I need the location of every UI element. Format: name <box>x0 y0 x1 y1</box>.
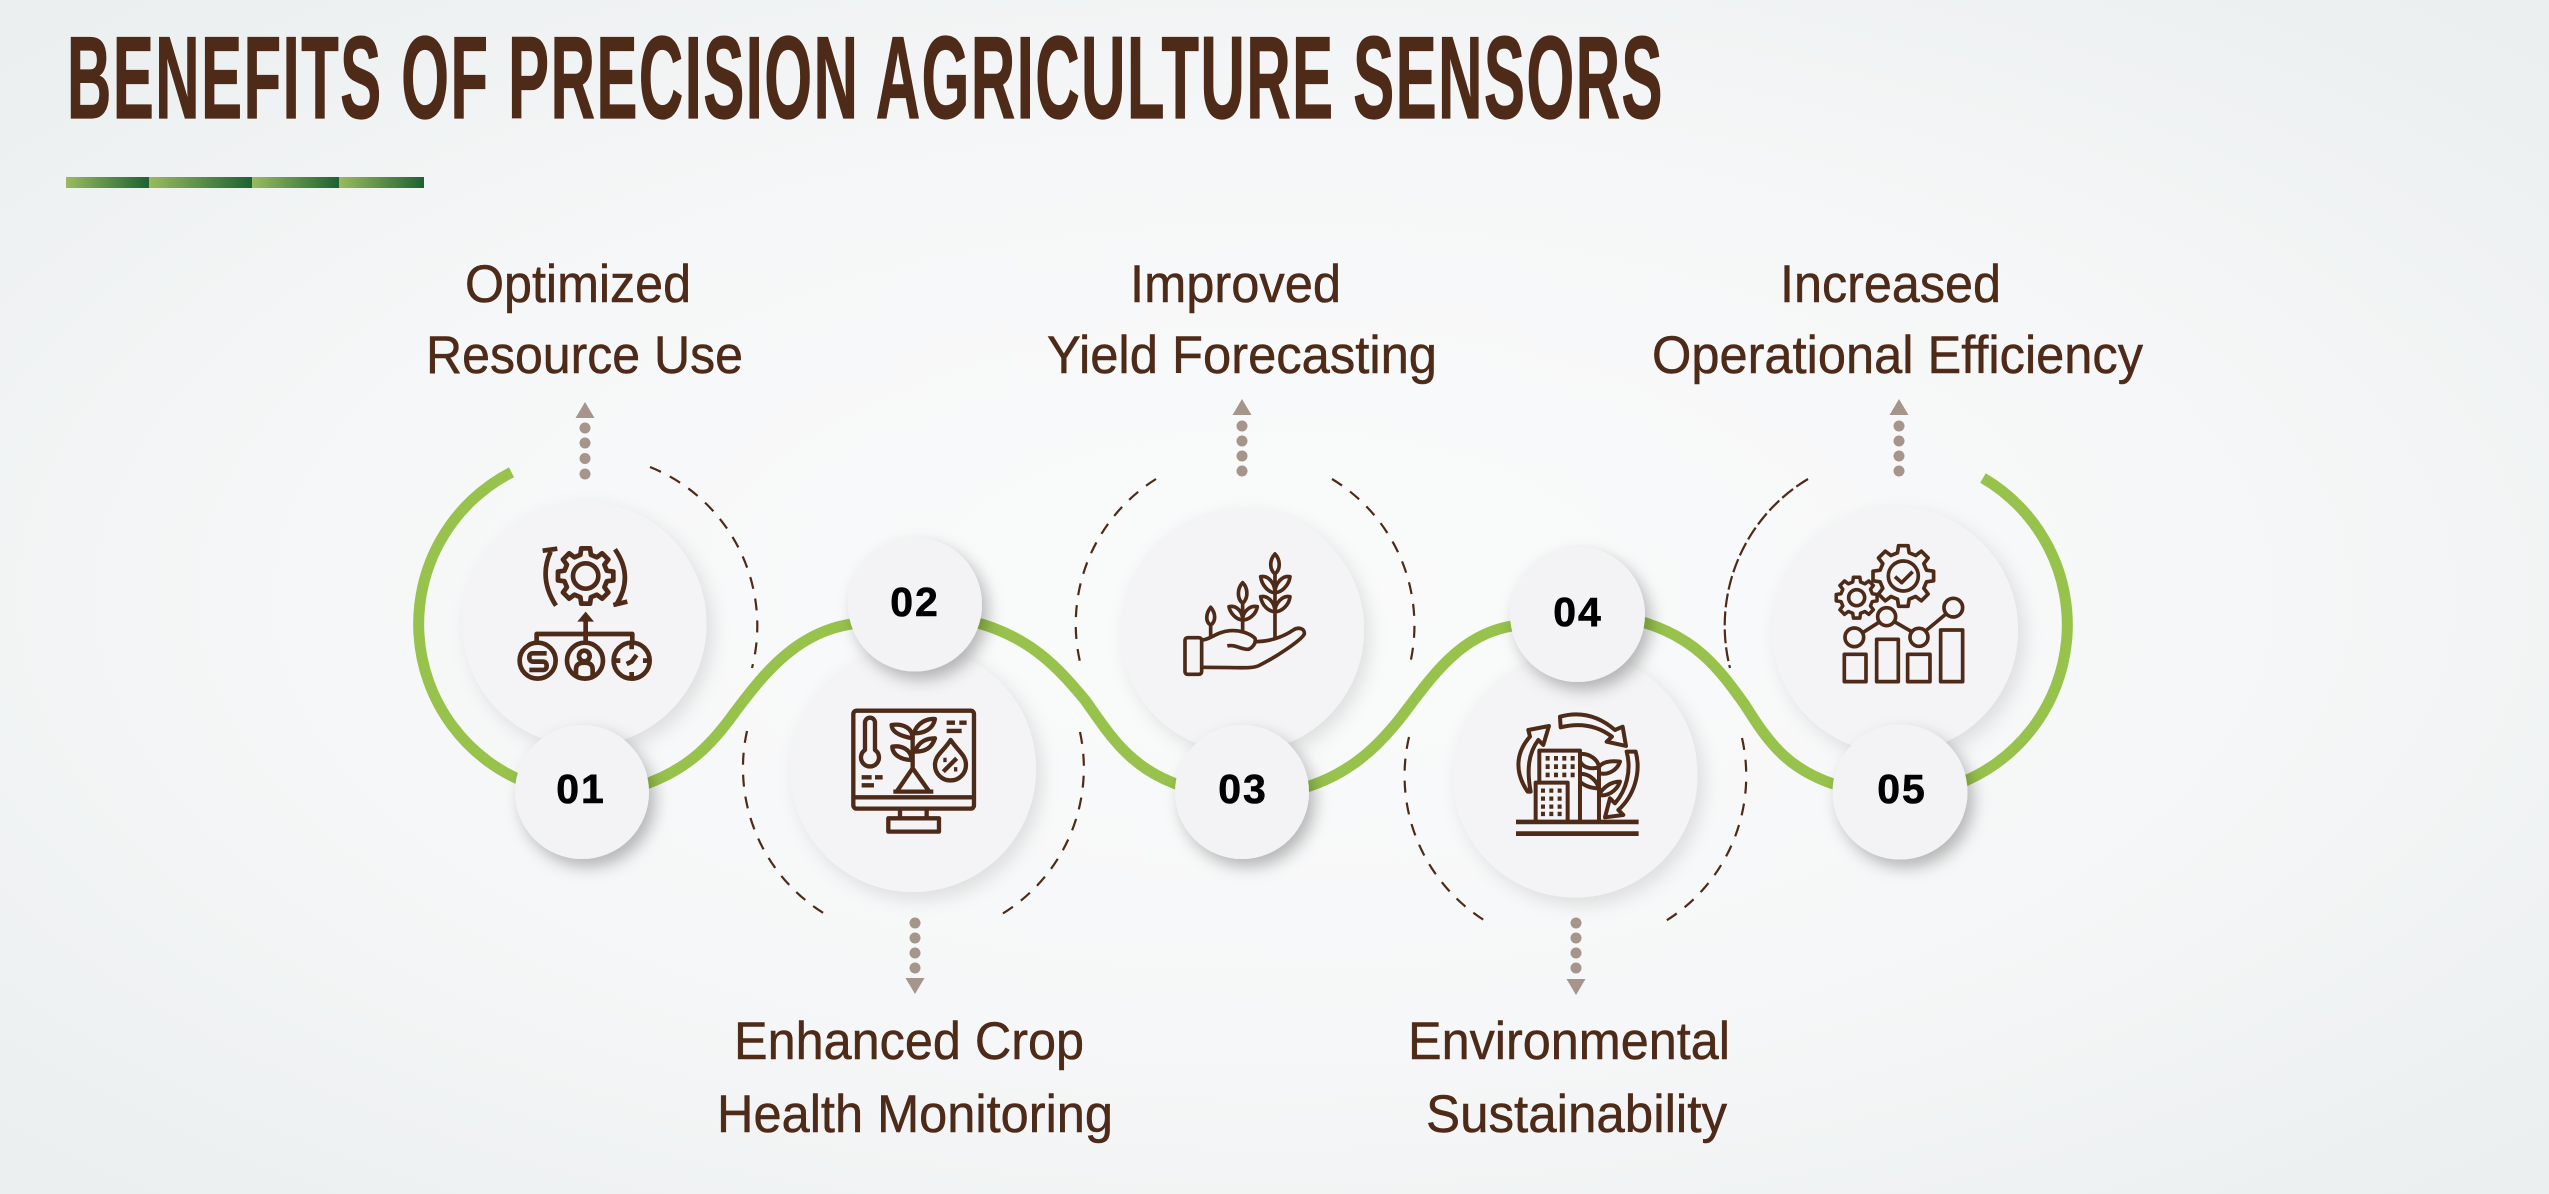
icon circle 02 <box>790 646 1036 892</box>
icon: gear and resources <box>520 548 650 679</box>
dashed arc 05 <box>1725 479 1808 668</box>
icon circle 05 <box>1772 507 2018 753</box>
step 04: environmental sustainability <box>1405 547 1746 1144</box>
number 01 badge <box>515 725 649 859</box>
step 01: optimized resource use <box>426 255 757 859</box>
label 04 <box>1408 1012 1730 1144</box>
dashed arcs 02 <box>743 731 1084 914</box>
icon: monitor with plant <box>853 711 974 832</box>
number 05 badge: 05 <box>1877 766 1927 812</box>
label 03: Yield Forecasting <box>1047 326 1437 385</box>
label 02: Health Monitoring <box>717 1085 1113 1144</box>
arrow down 04 <box>1566 918 1586 995</box>
label 02: Enhanced Crop <box>734 1012 1084 1071</box>
label 05 <box>1652 255 2143 385</box>
number 03 badge: 03 <box>1218 766 1268 812</box>
label 01: Optimized <box>465 255 691 314</box>
number 02 badge <box>848 538 982 672</box>
number 03 badge <box>1175 725 1309 859</box>
step 05: increased operational efficiency <box>1652 255 2143 860</box>
icon circle 03 <box>1120 508 1364 752</box>
arrow up 03 <box>1232 399 1252 476</box>
label 02 <box>717 1012 1113 1144</box>
label 01: Resource Use <box>426 326 743 385</box>
arrow down 02 <box>906 918 924 994</box>
icon: buildings, plant, recycle arrows <box>1516 714 1639 834</box>
label 04: Sustainability <box>1426 1085 1727 1144</box>
icon: hand with sprouts <box>1185 554 1304 674</box>
title accent bar <box>66 177 424 188</box>
label 03: Improved <box>1130 255 1341 314</box>
label 05: Increased <box>1780 255 2001 314</box>
number 04 badge: 04 <box>1553 589 1603 635</box>
label 03 <box>1047 255 1437 385</box>
green wave connector <box>419 472 2067 789</box>
step 02: enhanced crop health monitoring <box>717 538 1113 1144</box>
dashed arcs 03 <box>1076 479 1414 666</box>
icon: gears and growth chart <box>1836 546 1963 682</box>
number 04 badge <box>1510 547 1645 682</box>
step 03: improved yield forecasting <box>1047 255 1437 859</box>
arrow up 01 <box>576 402 594 480</box>
label 05: Operational Efficiency <box>1652 326 2143 385</box>
label 01 <box>426 255 743 385</box>
icon circle 04 <box>1452 652 1698 898</box>
dashed arc 01 <box>650 467 757 668</box>
icon circle 01 <box>462 502 706 746</box>
arrow up 05 <box>1890 399 1908 476</box>
label 04: Environmental <box>1408 1012 1730 1071</box>
dashed arcs 04 <box>1405 737 1746 922</box>
number 01 badge: 01 <box>556 766 606 812</box>
number 05 badge <box>1832 724 1968 860</box>
number 02 badge: 02 <box>890 579 940 625</box>
